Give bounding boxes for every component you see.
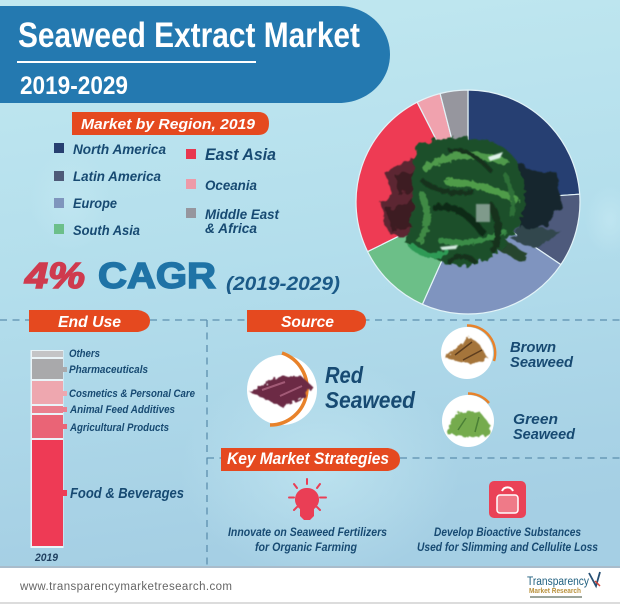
green seaweed mass (404, 137, 525, 266)
legend item: middle east and africa: & Africa (205, 220, 257, 236)
pie chart: market by region (356, 90, 580, 314)
icon: weighing scale (489, 481, 526, 518)
bar labels: Pharmaceuticals (69, 364, 148, 376)
legend item: east asia: East Asia (205, 145, 276, 164)
legend item: europe: Europe (73, 195, 117, 211)
legend item: middle east and africa: Middle East (205, 206, 280, 222)
strategy text: fertilizers: for Organic Farming (255, 542, 357, 554)
label: brown seaweed: Brown (510, 339, 556, 356)
slice: middle east and africa (440, 90, 468, 202)
CAGR callout: 4% (24, 255, 85, 296)
CAGR callout: (2019-2029) (226, 274, 340, 295)
title: Seaweed Extract Market (18, 16, 360, 55)
legend: regions (54, 141, 280, 238)
slice: north america (468, 90, 580, 202)
label: brown seaweed (510, 339, 574, 371)
label: red seaweed: Red (325, 362, 364, 388)
legend item: south asia: South Asia (73, 222, 140, 238)
heading: key market strategies: Key Market Strategies (227, 450, 389, 468)
stacked bar: end use (30, 350, 64, 548)
footer (0, 566, 620, 604)
slice: europe (422, 202, 561, 314)
logo: Transparency (527, 576, 589, 588)
segment: others (32, 351, 63, 357)
dark seaweed fringe (381, 150, 562, 262)
years: 2019-2029 (20, 72, 128, 100)
label: red seaweed: Seaweed (325, 387, 416, 413)
legend item: north america: North America (73, 141, 166, 157)
bar labels: Others (69, 348, 100, 360)
heading: end use (29, 310, 150, 332)
heading: end use: End Use (58, 314, 121, 331)
segment: cosmetics (32, 381, 63, 404)
legend item: europe (54, 195, 117, 211)
legend item: oceania: Oceania (205, 177, 257, 193)
label: green seaweed: Green (513, 411, 558, 428)
slice: east asia (356, 102, 468, 252)
label: red seaweed (325, 362, 416, 413)
icon: green seaweed (442, 393, 494, 447)
slice: south asia (368, 202, 468, 304)
seaweed highlights (440, 152, 503, 250)
icon: light bulb (289, 479, 326, 520)
label: green seaweed (513, 411, 576, 443)
website url: www.transparencymarketresearch.com (19, 581, 232, 593)
slice: oceania (417, 94, 468, 202)
segment: food and beverages (32, 440, 63, 546)
CAGR callout: CAGR (98, 255, 216, 296)
strategy text: fertilizers: Innovate on Seaweed Fertilizers (228, 527, 387, 539)
section dividers (0, 320, 620, 566)
bar labels (34, 348, 195, 564)
strategy text: bioactive substances: Develop Bioactive Substances (434, 527, 581, 539)
segment: pharmaceuticals (32, 359, 63, 379)
heading: source (247, 310, 366, 332)
seaweed leaf texture (412, 150, 516, 262)
logo: Market Research (529, 588, 581, 595)
strategy text: bioactive substances: Used for Slimming and Cellulite Loss (417, 542, 598, 554)
legend item: latin america: Latin America (73, 168, 161, 184)
heading: market by region: Market by Region, 2019 (81, 116, 256, 133)
bar labels: Agricultural Products (69, 422, 169, 434)
heading: source: Source (281, 314, 334, 331)
heading: market by region (72, 112, 269, 135)
strategy text: fertilizers (228, 527, 387, 554)
icon: red seaweed (247, 353, 317, 425)
title rule (17, 61, 256, 63)
title banner (0, 6, 390, 103)
seaweed photo (381, 137, 562, 266)
bar labels: Animal Feed Additives (69, 404, 175, 416)
logo (527, 572, 600, 598)
legend item: middle east and africa (186, 206, 280, 236)
CAGR callout (24, 255, 340, 296)
bar labels: 2019 (34, 552, 59, 564)
label: brown seaweed: Seaweed (510, 354, 574, 371)
bar labels: Cosmetics & Personal Care (69, 388, 195, 400)
slice: latin america (468, 194, 580, 265)
segment: animal feed (32, 406, 63, 413)
label: green seaweed: Seaweed (513, 426, 576, 443)
bar labels: Food & Beverages (70, 485, 184, 502)
segment: agricultural (32, 415, 63, 438)
strategy text: bioactive substances (417, 527, 598, 554)
icon: brown seaweed (441, 325, 495, 379)
